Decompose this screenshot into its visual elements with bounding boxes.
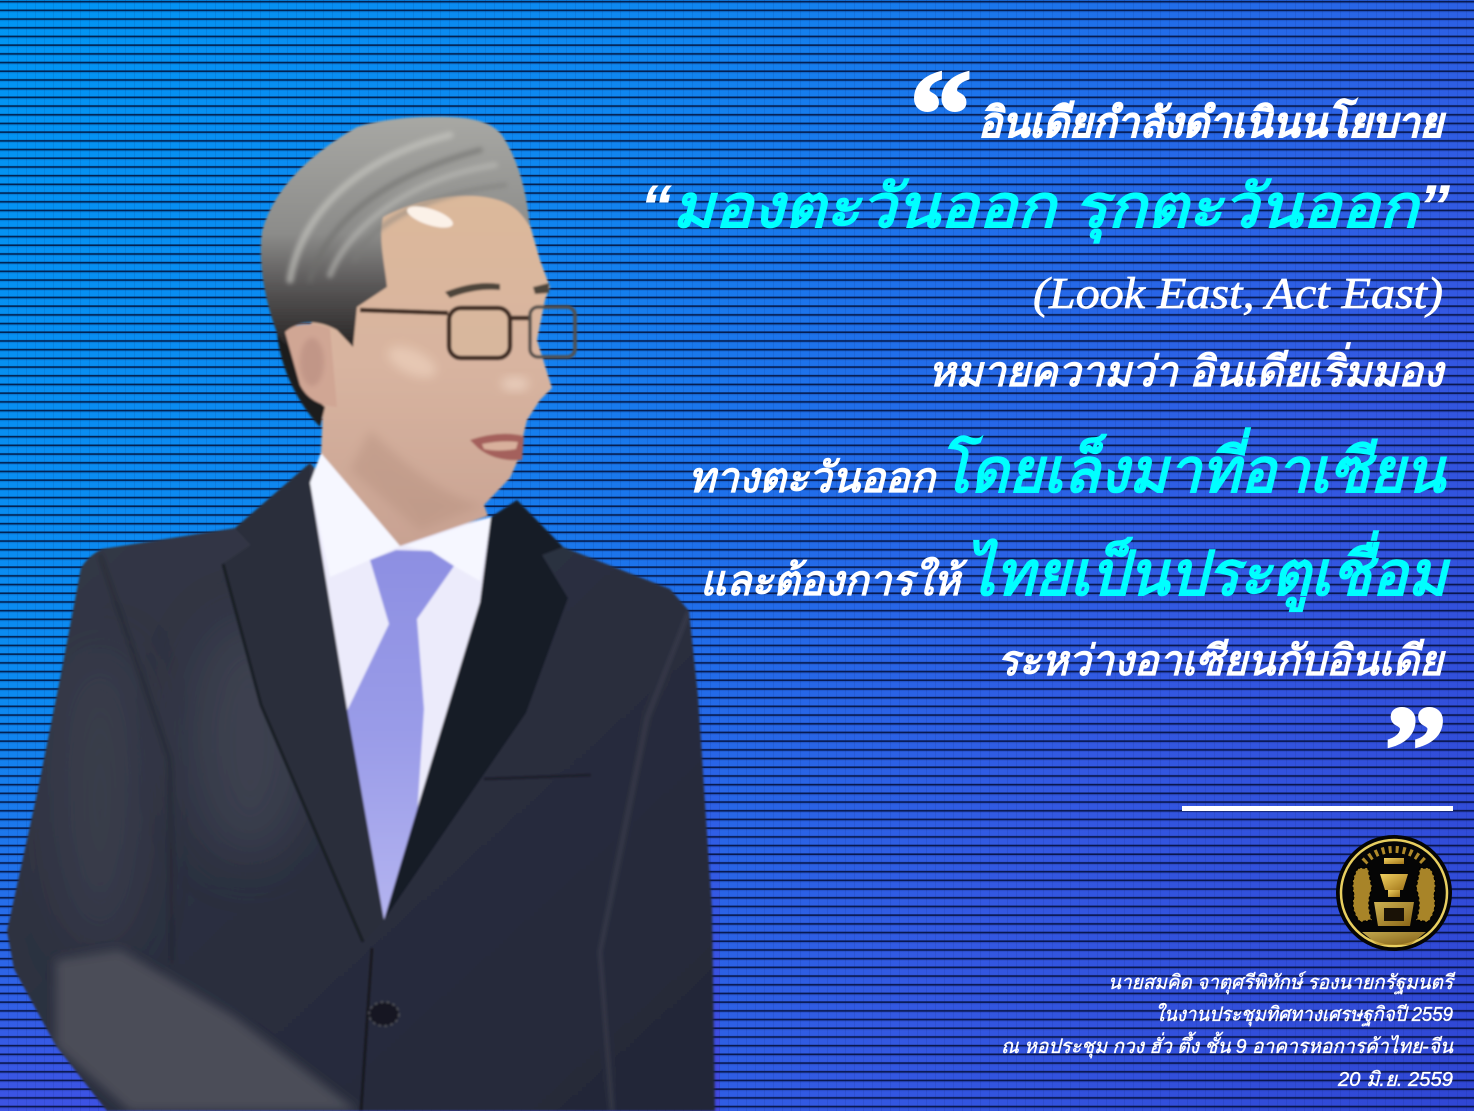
glasses — [360, 307, 575, 358]
mouth — [470, 434, 524, 460]
line 1: อินเดียกำลังดำเนินนโยบาย — [978, 98, 1446, 146]
button — [369, 1002, 399, 1026]
hair — [261, 117, 530, 350]
line 4: หมายความว่า อินเดียเริ่มมอง — [928, 342, 1446, 395]
divider line — [1182, 806, 1453, 811]
seal: right guardian lion — [1416, 868, 1435, 922]
back hair — [277, 333, 325, 427]
opening quotation mark: “ — [910, 46, 972, 184]
ear — [285, 324, 337, 407]
line 7: ระหว่างอาเซียนกับอินเดีย — [997, 637, 1446, 684]
left collar — [310, 453, 400, 577]
line 5 cyan part: โดยเล็งมาที่อาเซียน — [938, 427, 1448, 506]
left lapel — [223, 463, 384, 942]
jaw shadow — [350, 430, 484, 530]
line 6 white part: และต้องการให้ — [700, 556, 969, 604]
jacket — [7, 463, 715, 1111]
tie — [347, 550, 454, 920]
hair strands — [290, 135, 505, 280]
forehead highlight — [405, 202, 455, 232]
source caption — [1001, 971, 1456, 1091]
left lapel edge — [223, 564, 363, 942]
icon: Thai government seal — [1336, 835, 1452, 951]
line 3: (Look East, Act East) — [1033, 269, 1443, 318]
seal: pedestal panel — [1384, 908, 1404, 921]
caption line 2: ในงานประชุมทิศทางเศรษฐกิจปี 2559 — [1155, 1003, 1453, 1027]
caption line 3: ณ หอประชุม กวง ฮั่ว ตึ้ง ชั้น 9 อาคารหอการค้าไทย-จีน — [1001, 1031, 1454, 1059]
seal: top ornament arc — [1364, 849, 1424, 862]
cheek highlight — [383, 340, 441, 384]
right lapel — [384, 500, 568, 920]
seal: left guardian lion — [1353, 868, 1372, 922]
mouth opening — [482, 441, 518, 450]
breast pocket — [484, 775, 591, 779]
line 6 cyan part: ไทยเป็นประตูเชื่อม — [965, 530, 1451, 613]
line 2: “มองตะวันออก รุกตะวันออก ” — [640, 173, 1450, 244]
line 5 white part: ทางตะวันออก — [688, 454, 938, 501]
nose highlight — [501, 377, 529, 391]
neck and face — [283, 185, 552, 546]
quote text — [640, 46, 1451, 820]
eyebrows — [445, 283, 549, 298]
caption line 4: 20 มิ.ย. 2559 — [1337, 1069, 1453, 1091]
ear inner — [300, 338, 324, 386]
seal: central urn and pedestal — [1362, 858, 1426, 945]
caption line 1: นายสมคิด จาตุศรีพิทักษ์ รองนายกรัฐมนตรี — [1108, 971, 1456, 995]
closing quotation mark: ” — [1384, 682, 1447, 820]
shirt — [310, 453, 491, 920]
portrait: man in dark suit — [7, 117, 715, 1111]
right collar — [405, 517, 491, 581]
jacket shading — [56, 555, 689, 1111]
